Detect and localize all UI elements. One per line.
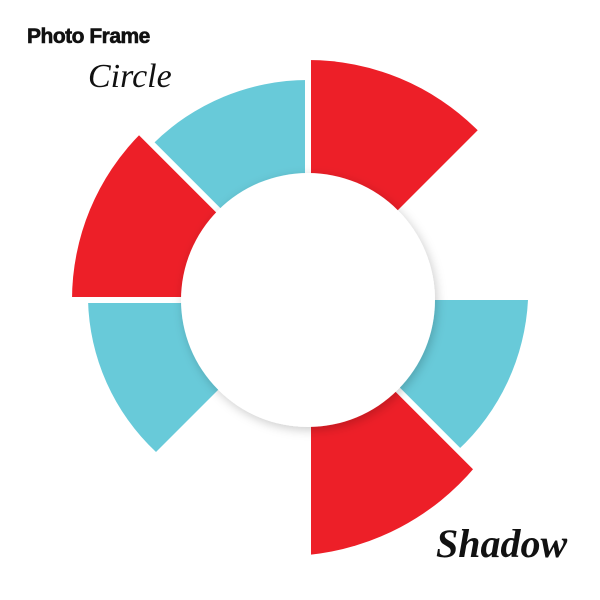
title: Photo Frame: [27, 25, 150, 48]
segment: bottom left cyan: [88, 300, 308, 452]
segment: right cyan: [308, 300, 528, 450]
segment: left red: [72, 133, 308, 300]
center circle: [181, 173, 435, 427]
segment: top left cyan: [152, 80, 308, 300]
segment: top right red: [308, 60, 478, 300]
subtitle: Circle: [88, 58, 172, 95]
segment: bottom red: [308, 300, 475, 555]
signature text: Shadow: [436, 521, 567, 566]
